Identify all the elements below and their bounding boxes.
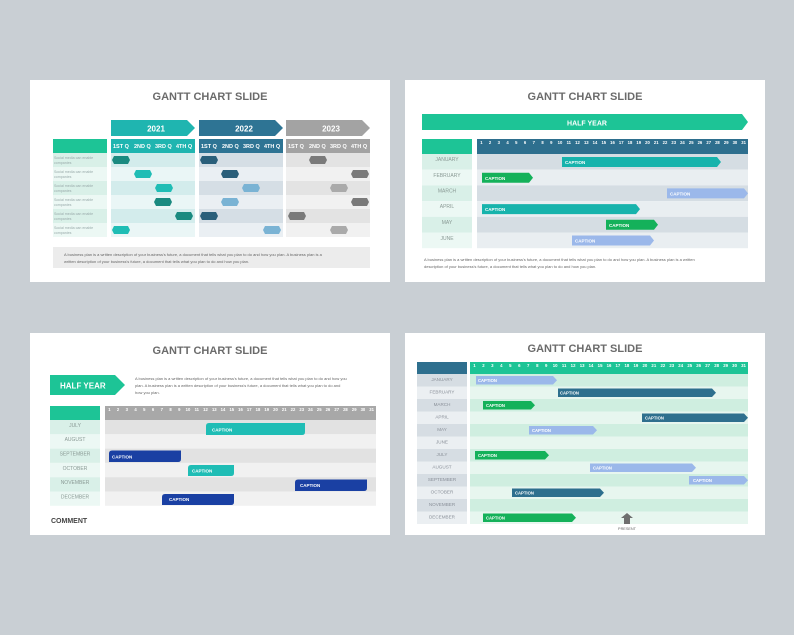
header: 17 xyxy=(247,407,252,412)
bars: CAPTION xyxy=(485,176,505,181)
header row: 4TH Q xyxy=(351,144,368,150)
rows: SEPTEMBER xyxy=(428,477,457,482)
row labels xyxy=(54,156,93,235)
header: 23 xyxy=(669,363,675,368)
rows: JULY xyxy=(437,452,447,457)
rows: JUNE xyxy=(440,236,454,242)
bars: CAPTION xyxy=(192,468,212,474)
bars xyxy=(475,376,748,522)
header: 30 xyxy=(733,140,738,145)
rows: APRIL xyxy=(440,204,454,210)
bars: CAPTION xyxy=(565,160,585,165)
bars: CAPTION xyxy=(300,483,320,488)
bars: CAPTION xyxy=(486,403,505,408)
header row: 1ST Q xyxy=(201,144,218,150)
bars: CAPTION xyxy=(112,454,132,460)
header: 13 xyxy=(580,363,585,368)
header: 9 xyxy=(178,407,181,412)
year arrows: 2022 xyxy=(235,124,253,134)
header: 2 xyxy=(489,140,492,145)
header: 1 xyxy=(480,140,483,145)
bars: CAPTION xyxy=(575,238,595,244)
rows xyxy=(50,420,376,506)
header: 31 xyxy=(741,363,747,368)
panel: slide 3 july-december gantt xyxy=(30,333,390,535)
header: 10 xyxy=(558,140,563,145)
header: 11 xyxy=(195,407,200,412)
header: 8 xyxy=(541,140,544,145)
rows: MARCH xyxy=(438,188,457,194)
description: description of your business's future, a document that tells what you plan to do and how you plan. xyxy=(424,264,596,269)
header row: 4TH Q xyxy=(176,144,193,150)
row labels: Social media can enable xyxy=(54,170,93,174)
header: 4 xyxy=(500,363,503,368)
header: 14 xyxy=(593,140,598,145)
row labels: Social media can enable xyxy=(54,226,93,230)
bars: CAPTION xyxy=(485,207,505,212)
header: 29 xyxy=(724,140,729,145)
header row: 2ND Q xyxy=(222,144,240,150)
bars: CAPTION xyxy=(670,192,690,196)
header: 19 xyxy=(264,407,270,412)
header row: 3RD Q xyxy=(243,144,261,150)
row labels: Social media can enable xyxy=(54,184,93,188)
header: 3 xyxy=(126,407,129,412)
header: 20 xyxy=(273,407,278,412)
panel: slide 2 half year gantt xyxy=(405,80,765,282)
rows: JULY xyxy=(69,423,82,429)
row labels: companies xyxy=(54,203,72,207)
description: plan. A business plan is a written description of your business's future, a document that tells what you plan to do and xyxy=(135,383,340,388)
header: 31 xyxy=(369,407,375,412)
rows: JANUARY xyxy=(431,377,453,382)
header: 22 xyxy=(291,407,296,412)
row labels: Social media can enable xyxy=(54,198,93,202)
header: 12 xyxy=(571,363,576,368)
header: 25 xyxy=(317,407,322,412)
header: 8 xyxy=(536,363,539,368)
header: 18 xyxy=(256,407,261,412)
bars xyxy=(109,423,367,505)
rows: MARCH xyxy=(434,402,450,407)
description xyxy=(424,257,695,269)
row labels: companies xyxy=(54,175,72,179)
header: 5 xyxy=(509,363,512,368)
row labels: Social media can enable xyxy=(54,156,93,160)
header: 28 xyxy=(343,407,348,412)
header: 7 xyxy=(161,407,164,412)
icon: present arrow: PRESENT xyxy=(618,527,637,531)
rows: FEBRUARY xyxy=(430,390,454,394)
rows: JUNE xyxy=(436,440,448,444)
header: 21 xyxy=(651,363,657,368)
header: 18 xyxy=(625,363,630,368)
year arrows xyxy=(111,120,370,136)
header: 27 xyxy=(706,140,712,145)
header: 21 xyxy=(654,140,659,145)
header: 15 xyxy=(229,407,235,412)
half year arrow: HALF YEAR xyxy=(567,120,607,128)
description: A business plan is a written description of your business's future, a document that tells what you plan to do and how you plan. A business plan is a written xyxy=(424,257,695,262)
icon: present arrow xyxy=(618,513,637,531)
bars: CAPTION xyxy=(609,223,629,228)
header: 14 xyxy=(589,363,594,368)
rows: DECEMBER xyxy=(429,514,456,520)
title: GANTT CHART SLIDE xyxy=(153,345,267,357)
header xyxy=(50,406,376,420)
row labels: companies xyxy=(54,161,72,165)
header row: 2ND Q xyxy=(134,144,152,150)
header: 9 xyxy=(545,363,548,368)
header: 2 xyxy=(117,407,120,412)
rows: APRIL xyxy=(435,414,449,420)
header: 9 xyxy=(550,140,553,145)
rows xyxy=(422,154,748,248)
header: 27 xyxy=(334,407,340,412)
half year arrow: HALF YEAR xyxy=(60,382,106,390)
header: 25 xyxy=(689,140,694,145)
description xyxy=(135,376,347,395)
header: 28 xyxy=(714,363,720,368)
header: 10 xyxy=(553,363,558,368)
bars: CAPTION xyxy=(515,490,534,496)
header row: 3RD Q xyxy=(330,144,348,150)
rows: NOVEMBER xyxy=(429,502,456,507)
header: 7 xyxy=(527,363,530,368)
header: 6 xyxy=(524,140,527,145)
header row xyxy=(53,139,370,153)
rows: FEBRUARY xyxy=(433,173,461,179)
header: 16 xyxy=(610,140,615,145)
description: A business plan is a written description of your business's future, a document that tells what you plan to do and how you xyxy=(135,376,347,381)
header row: 4TH Q xyxy=(264,144,281,150)
header: 3 xyxy=(491,363,494,368)
header: 26 xyxy=(696,363,702,368)
header: 19 xyxy=(633,363,639,368)
header: 14 xyxy=(221,407,226,412)
bars: CAPTION xyxy=(693,478,712,483)
header: 1 xyxy=(473,363,476,368)
half year arrow xyxy=(50,375,125,395)
bars: CAPTION xyxy=(212,428,232,432)
header xyxy=(417,362,748,374)
header: 29 xyxy=(723,363,729,368)
header: 22 xyxy=(663,140,668,145)
bars: CAPTION xyxy=(478,453,497,458)
header xyxy=(422,139,748,154)
year arrows: 2023 xyxy=(322,124,340,134)
header: 3 xyxy=(498,140,501,145)
row labels: Social media can enable xyxy=(54,212,93,216)
header: 5 xyxy=(143,407,146,412)
rows: AUGUST xyxy=(65,437,85,443)
row labels: companies xyxy=(54,231,72,235)
header: 11 xyxy=(562,363,567,368)
half year arrow xyxy=(422,114,748,130)
header: 22 xyxy=(660,363,666,368)
header: 29 xyxy=(352,407,357,412)
title: GANTT CHART SLIDE xyxy=(153,91,267,103)
rows: NOVEMBER xyxy=(61,480,90,486)
hexagon bars xyxy=(112,156,369,234)
header row: 3RD Q xyxy=(155,144,173,150)
comment heading: COMMENT xyxy=(51,518,88,525)
header: 17 xyxy=(616,363,621,368)
header: 19 xyxy=(636,140,642,145)
year arrows: 2021 xyxy=(147,124,165,134)
header: 26 xyxy=(698,140,703,145)
header: 11 xyxy=(567,140,572,145)
bars: CAPTION xyxy=(169,497,189,502)
header row: 1ST Q xyxy=(288,144,305,150)
title: GANTT CHART SLIDE xyxy=(528,91,642,103)
header: 10 xyxy=(186,407,191,412)
row labels: companies xyxy=(54,217,72,221)
bars: CAPTION xyxy=(560,390,579,396)
header: 21 xyxy=(282,407,287,412)
description box: A business plan is a written description of your business's future, a document that tells what you plan to do and how you plan. A business plan is a xyxy=(64,252,323,257)
bars xyxy=(482,157,748,246)
description box xyxy=(53,247,370,268)
header: 12 xyxy=(203,407,208,412)
bars: CAPTION xyxy=(486,516,505,520)
header: 26 xyxy=(326,407,331,412)
header: 5 xyxy=(515,140,518,145)
header: 24 xyxy=(678,363,684,368)
header: 12 xyxy=(575,140,580,145)
header: 28 xyxy=(715,140,720,145)
header: 7 xyxy=(533,140,536,145)
header: 31 xyxy=(741,140,747,145)
header: 23 xyxy=(299,407,305,412)
rows: OCTOBER xyxy=(431,490,454,494)
header: 20 xyxy=(645,140,650,145)
header: 27 xyxy=(705,363,711,368)
description: how you plan. xyxy=(135,390,160,395)
header: 25 xyxy=(687,363,693,368)
rows: MAY xyxy=(437,427,447,432)
bars: CAPTION xyxy=(593,466,612,470)
header: 4 xyxy=(134,407,137,412)
header: 1 xyxy=(108,407,111,412)
header: 6 xyxy=(152,407,155,412)
panel: slide 4 full year gantt xyxy=(405,333,765,535)
header row: 2ND Q xyxy=(309,144,327,150)
bars: CAPTION xyxy=(532,428,551,433)
header: 8 xyxy=(169,407,172,412)
row labels: companies xyxy=(54,189,72,193)
rows: OCTOBER xyxy=(63,466,88,472)
rows: DECEMBER xyxy=(61,494,90,500)
header: 16 xyxy=(607,363,612,368)
header: 24 xyxy=(308,407,313,412)
header: 30 xyxy=(361,407,366,412)
header: 18 xyxy=(628,140,633,145)
bars: CAPTION xyxy=(645,416,664,420)
header row: 1ST Q xyxy=(113,144,130,150)
rows: JANUARY xyxy=(435,157,459,163)
rows: AUGUST xyxy=(432,464,452,470)
panel: slide 1 quarterly gantt xyxy=(30,80,390,282)
rows background xyxy=(53,153,370,237)
header: 13 xyxy=(584,140,589,145)
header: 16 xyxy=(238,407,243,412)
header: 2 xyxy=(482,363,485,368)
header: 23 xyxy=(671,140,677,145)
header: 6 xyxy=(518,363,521,368)
header: 17 xyxy=(619,140,624,145)
header: 30 xyxy=(732,363,738,368)
header: 4 xyxy=(506,140,509,145)
title: GANTT CHART SLIDE xyxy=(528,343,642,355)
rows: MAY xyxy=(442,220,453,226)
rows xyxy=(417,374,748,524)
header: 15 xyxy=(598,363,603,368)
header: 13 xyxy=(212,407,217,412)
header: 24 xyxy=(680,140,685,145)
rows: SEPTEMBER xyxy=(60,452,91,458)
header: 15 xyxy=(601,140,607,145)
bars: CAPTION xyxy=(478,378,497,383)
description box: written description of your business's future, a document that tells what you plan to do and how you plan. xyxy=(64,259,249,264)
header: 20 xyxy=(643,363,648,368)
